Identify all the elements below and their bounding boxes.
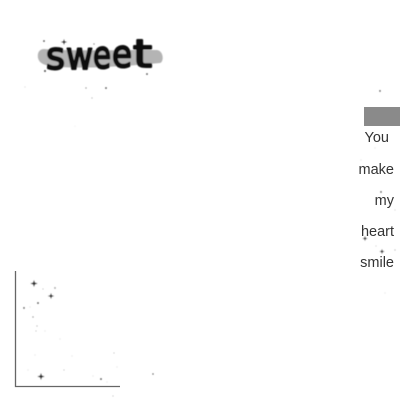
grey brush stroke xyxy=(38,49,163,68)
line: heart: heart xyxy=(361,224,394,240)
line: You: You xyxy=(365,130,389,146)
word: sweet: t xyxy=(133,32,152,76)
word: sweet: e xyxy=(93,34,111,77)
word: sweet: w xyxy=(66,35,93,78)
line: smile: smile xyxy=(360,255,394,271)
line: my: my xyxy=(375,193,395,209)
word: sweet: e xyxy=(112,33,132,76)
title: sweet on grey brush stroke xyxy=(38,32,163,78)
grey rectangle xyxy=(364,107,400,126)
chart axes xyxy=(16,271,120,386)
poem text xyxy=(359,130,395,271)
word: sweet xyxy=(46,32,152,78)
line: make: make xyxy=(359,162,394,178)
word: sweet: s xyxy=(46,35,65,78)
